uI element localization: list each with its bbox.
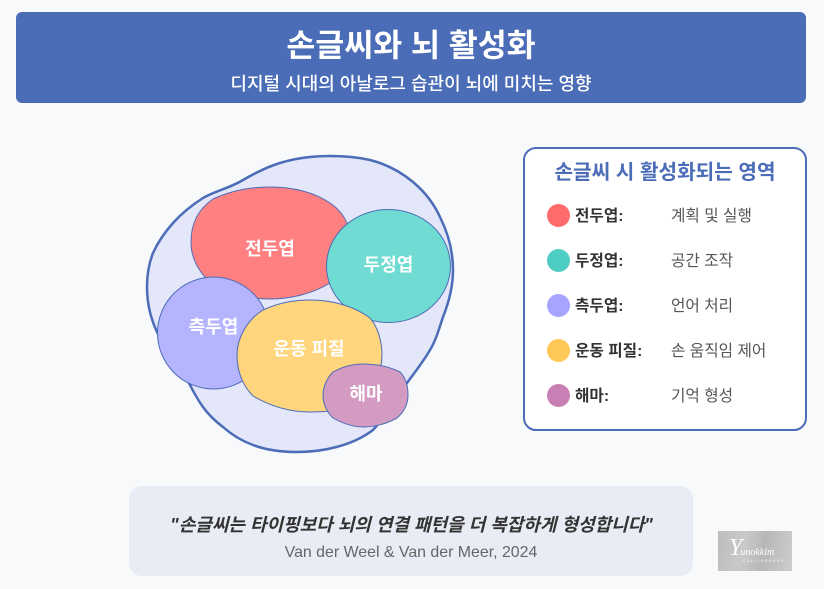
legend item: frontal	[547, 204, 752, 227]
region: frontal lobe: 전두엽	[245, 239, 295, 259]
legend item: hippocampus: 해마:	[575, 388, 609, 405]
brain outline	[147, 156, 453, 452]
legend item: temporal	[547, 294, 733, 317]
legend item: parietal	[547, 249, 733, 272]
legend item: motor cortex: 손 움직임 제어	[671, 343, 766, 360]
watermark logo: CALLIGRAPHY	[743, 559, 785, 563]
watermark logo	[718, 531, 792, 571]
title: 손글씨와 뇌 활성화	[286, 27, 536, 63]
watermark logo: Yunokkim	[729, 535, 774, 561]
legend item: parietal: 두정엽:	[575, 253, 624, 270]
region: hippocampus	[323, 364, 408, 427]
region: hippocampus: 해마	[349, 384, 383, 404]
region: temporal lobe	[158, 277, 270, 389]
legend item: hippocampus	[547, 384, 733, 407]
region: temporal lobe: 측두엽	[189, 317, 238, 337]
legend item: temporal: 언어 처리	[671, 298, 733, 315]
region: motor cortex	[237, 300, 382, 412]
quote text: "손글씨는 타이핑보다 뇌의 연결 패턴을 더 복잡하게 형성합니다"	[170, 515, 653, 535]
legend panel	[523, 147, 807, 431]
region: parietal lobe	[326, 210, 450, 322]
region: frontal lobe	[191, 187, 348, 299]
header banner	[16, 12, 806, 103]
legend item: temporal: 측두엽:	[575, 298, 624, 315]
quote source: Van der Weel & Van der Meer, 2024	[285, 544, 537, 561]
region: parietal lobe: 두정엽	[364, 255, 413, 275]
legend title: 손글씨 시 활성화되는 영역	[554, 162, 776, 184]
subtitle: 디지털 시대의 아날로그 습관이 뇌에 미치는 영향	[230, 74, 592, 94]
legend item: frontal: 계획 및 실행	[671, 208, 752, 225]
legend item: parietal: 공간 조작	[671, 253, 733, 270]
legend item: motor cortex	[547, 339, 766, 362]
legend item: frontal: 전두엽:	[575, 208, 624, 225]
quote panel	[129, 486, 693, 576]
region: motor cortex: 운동 피질	[273, 339, 345, 359]
legend item: hippocampus: 기억 형성	[671, 388, 733, 405]
legend item: motor cortex: 운동 피질:	[575, 343, 642, 360]
